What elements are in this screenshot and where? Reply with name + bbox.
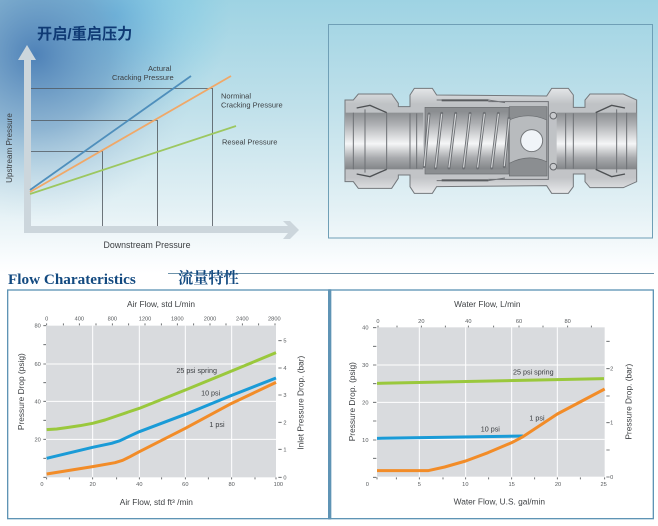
air flow right scale: 3: [283, 393, 287, 399]
curve: 25 psi spring: [47, 353, 276, 430]
water flow bottom scale: 0: [366, 482, 369, 488]
upstream axis arrow: [18, 45, 299, 239]
guide lines: [31, 88, 212, 226]
curve labels: 1 psi: [209, 421, 225, 429]
water flow axis titles: [347, 299, 634, 507]
air flow bottom scale: [40, 482, 283, 488]
label: downstream pressure: Downstream Pressure: [103, 240, 191, 250]
curve: 10 psi: [377, 436, 523, 438]
water flow left scale: 30: [362, 363, 368, 369]
water flow left scale: 40: [362, 326, 368, 332]
curve labels: 1 psi: [529, 414, 545, 422]
air flow bottom scale: 0: [40, 482, 44, 488]
reseal pressure line: [30, 126, 236, 194]
water flow right scale: 2: [610, 367, 613, 373]
air flow bottom scale: 40: [136, 482, 142, 488]
air flow axis titles: Pressure Drop (psig): [16, 353, 26, 430]
water flow bottom scale: [366, 482, 607, 488]
air flow top scale: 2000: [204, 317, 216, 323]
plot area: [377, 327, 605, 477]
air flow top scale: 0: [45, 317, 48, 323]
air flow top scale: 1200: [139, 317, 151, 323]
air flow bottom scale: 60: [182, 482, 188, 488]
air flow top scale: 2800: [268, 317, 281, 323]
curve labels: [176, 367, 225, 429]
water flow top scale: 20: [418, 319, 424, 325]
air flow right scale: 2: [283, 420, 287, 426]
heading: flow characteristics: Flow Charateristics: [8, 271, 136, 288]
air flow axis titles: [16, 299, 306, 507]
water flow ticks: [373, 326, 610, 479]
water flow bottom scale: 15: [509, 482, 515, 488]
label: upstream pressure: Upstream Pressure: [5, 113, 14, 183]
air flow top scale: 400: [75, 317, 84, 323]
water flow bottom scale: 25: [601, 482, 607, 488]
water flow bottom scale: 5: [418, 482, 421, 488]
nominal cracking pressure line: [30, 76, 231, 192]
label: reseal pressure: Reseal Pressure: [222, 138, 277, 146]
curve labels: 10 psi: [201, 390, 221, 398]
spring coils: [424, 113, 509, 168]
panel: water flow chart: [328, 289, 653, 519]
air flow ticks: [43, 323, 282, 479]
air flow right scale: [283, 339, 287, 481]
panel: valve cross section: [328, 24, 652, 238]
curve labels: 10 psi: [481, 426, 500, 434]
curve labels: [481, 368, 554, 434]
air flow bottom scale: 80: [229, 482, 235, 488]
water flow top scale: 60: [516, 319, 522, 325]
air flow right scale: 1: [283, 447, 287, 453]
air flow left scale: [35, 324, 41, 443]
water flow top scale: 40: [465, 319, 471, 325]
panel: air flow chart: [8, 290, 330, 519]
air flow top scale: 800: [108, 317, 117, 323]
heading rule: [168, 272, 654, 274]
air flow top scale: 1800: [171, 317, 184, 323]
curve labels: 25 psi spring: [513, 368, 554, 376]
air flow bottom scale: 100: [274, 482, 283, 488]
water flow right scale: 0: [610, 475, 613, 481]
air flow right scale: 4: [283, 366, 287, 372]
air flow left scale: 60: [35, 362, 41, 368]
o-rings: [550, 112, 557, 119]
air flow top scale: 2400: [236, 317, 249, 323]
water flow axis titles: Water Flow, L/min: [454, 299, 521, 309]
water flow bottom scale: 10: [462, 482, 468, 488]
air flow left scale: 80: [35, 324, 41, 330]
water flow bottom scale: 20: [555, 482, 561, 488]
air flow right scale: 0: [283, 475, 287, 481]
air flow axis titles: Air Flow, std L/min: [127, 299, 195, 309]
plot area: [46, 326, 276, 477]
curve: 25 psi spring: [377, 379, 604, 383]
air flow right scale: 5: [283, 339, 287, 345]
label: actual cracking pressure: Actural: [148, 64, 172, 73]
curve labels: 25 psi spring: [176, 367, 217, 375]
title: cracking and reseal pressure: 开启/重启压力: [37, 25, 132, 43]
label: nominal cracking pressure: Cracking Pressure: [221, 100, 283, 110]
water flow top scale: 0: [376, 319, 380, 325]
curve: 1 psi: [377, 389, 605, 471]
water flow top scale: [376, 319, 571, 325]
actual cracking pressure line: [30, 76, 191, 190]
water flow axis titles: Pressure Drop. (psig): [347, 362, 357, 441]
air flow axis titles: Air Flow, std ft³ /min: [120, 497, 193, 507]
curve: 1 psi: [47, 382, 276, 474]
pressure diagram: [5, 45, 299, 250]
heading: flow characteristics in Chinese: 流量特性: [178, 269, 239, 287]
air flow left scale: 20: [35, 437, 41, 443]
air flow top scale: [45, 317, 281, 323]
label: nominal cracking pressure: Norminal: [221, 92, 251, 100]
water flow axis titles: Pressure Drop. (bar): [624, 363, 634, 440]
water flow right scale: 1: [610, 421, 613, 427]
water flow top scale: 80: [565, 319, 571, 325]
water flow left scale: 20: [362, 400, 368, 406]
label: actual cracking pressure: Cracking Pressure: [112, 73, 174, 82]
valve illustration: [345, 88, 637, 193]
water flow right scale: [610, 367, 613, 481]
water flow left scale: [362, 326, 368, 444]
air flow bottom scale: 20: [90, 482, 96, 488]
air flow left scale: 40: [35, 399, 41, 405]
air flow axis titles: Inlet Pressure Drop. (bar): [296, 355, 306, 450]
water flow left scale: 10: [362, 438, 368, 444]
water flow axis titles: Water Flow, U.S. gal/min: [454, 497, 545, 507]
curve: 10 psi: [47, 378, 276, 458]
